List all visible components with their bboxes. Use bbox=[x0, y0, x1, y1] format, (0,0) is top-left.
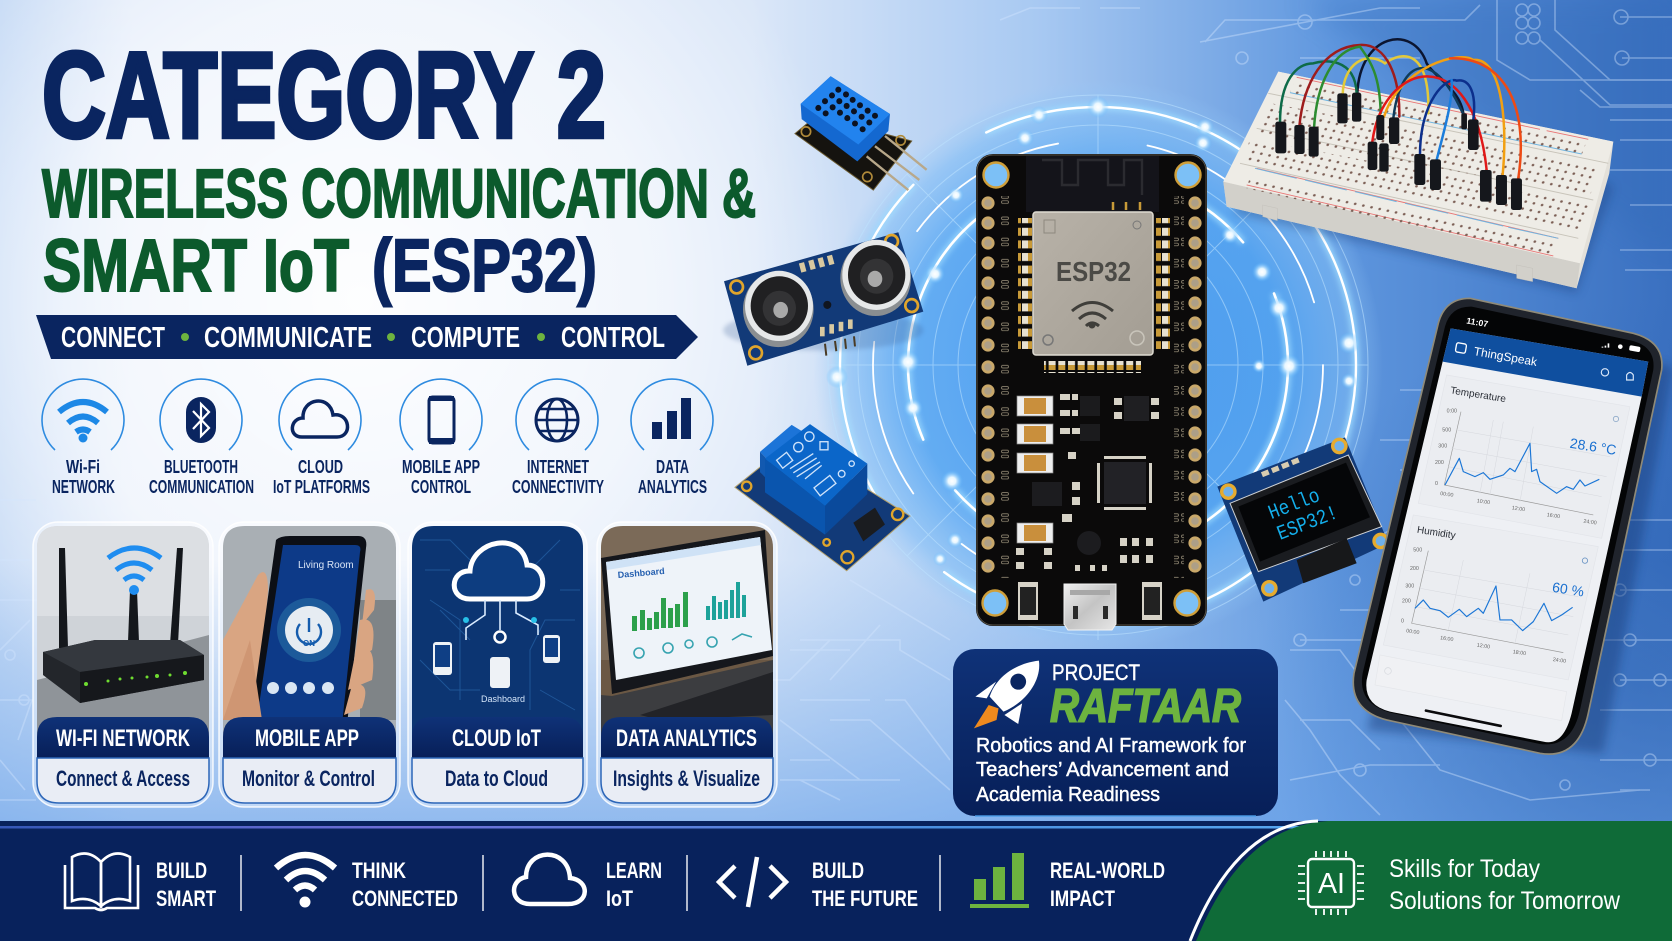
ribbon banner: CONTROL bbox=[561, 322, 665, 354]
label: learn iot: IoT bbox=[606, 886, 633, 911]
temperature chart: 200 bbox=[1435, 460, 1444, 466]
label: build smart bbox=[156, 858, 216, 911]
breadboard with jumper wires bbox=[1223, 39, 1613, 293]
icon: internet globe bbox=[512, 379, 604, 497]
icon: bluetooth: COMMUNICATION bbox=[149, 477, 254, 497]
icon: mobile app bbox=[400, 379, 482, 497]
icon: cloud bbox=[273, 379, 370, 497]
ribbon banner: CONNECT bbox=[61, 322, 165, 354]
panel: project raftaar: Robotics and AI Framework for bbox=[976, 735, 1246, 757]
icon: ultrasonic sensor bbox=[723, 232, 923, 366]
phone in hand photo bbox=[223, 526, 396, 736]
glowing wireless rings bbox=[813, 80, 1383, 650]
icon: wi-fi network: Wi-Fi bbox=[66, 457, 100, 477]
ESP32 metal shield bbox=[1033, 212, 1153, 355]
icon: relay module bbox=[735, 424, 910, 571]
panel: project raftaar: Academia Readiness bbox=[976, 784, 1160, 806]
micro USB port bbox=[1064, 584, 1116, 630]
panel: mobile app card bbox=[219, 522, 400, 807]
humidity chart: 18:00 bbox=[1512, 649, 1526, 657]
cloud network illustration: Dashboard bbox=[481, 694, 525, 704]
panel: skills tagline: Skills for Today bbox=[1389, 855, 1540, 883]
icon row bbox=[42, 379, 713, 497]
OLED display: Hello bbox=[1266, 485, 1324, 526]
empty phone card and home bar bbox=[1375, 655, 1567, 726]
app header: ThingSpeak bbox=[1473, 344, 1539, 369]
icon: wi-fi bbox=[276, 855, 335, 905]
header pins bbox=[981, 196, 1202, 578]
title: category 2: CATEGORY 2 bbox=[42, 27, 606, 163]
label: build the future bbox=[812, 858, 918, 911]
panel: mobile app card: Monitor & Control bbox=[242, 766, 375, 791]
icon: DHT temperature sensor bbox=[795, 76, 927, 190]
status bar: 11:07 bbox=[1466, 315, 1489, 329]
app header bbox=[1443, 328, 1648, 397]
smartphone showing ThingSpeak bbox=[1353, 298, 1672, 754]
label: real-world impact: IMPACT bbox=[1050, 886, 1115, 911]
icon: AI chip bbox=[1298, 851, 1364, 915]
label: build the future: THE FUTURE bbox=[812, 886, 918, 911]
label: think connected: THINK bbox=[352, 858, 406, 883]
panel: wi-fi network card: WI-FI NETWORK bbox=[56, 725, 190, 752]
temperature chart: 0 bbox=[1435, 481, 1438, 487]
label: build the future: BUILD bbox=[812, 858, 864, 883]
icon: mobile app: MOBILE APP bbox=[402, 457, 480, 477]
icon: cloud: CLOUD bbox=[298, 457, 343, 477]
humidity chart: 300 bbox=[1405, 583, 1414, 589]
panel: wi-fi network card bbox=[33, 522, 213, 807]
icon: internet globe: INTERNET bbox=[527, 457, 589, 477]
temperature chart: 12:00 bbox=[1511, 505, 1525, 513]
panel: data analytics card: DATA ANALYTICS bbox=[616, 725, 757, 752]
icon: bluetooth bbox=[149, 379, 254, 497]
status bar bbox=[1466, 315, 1641, 352]
icon: bar chart bbox=[970, 853, 1029, 908]
panel: project raftaar: RAFTAAR bbox=[1050, 679, 1241, 732]
icon: wi-fi network bbox=[42, 379, 124, 497]
label: learn iot bbox=[606, 858, 662, 911]
temperature chart: 28.6 °C bbox=[1569, 435, 1618, 458]
humidity chart bbox=[1383, 515, 1598, 680]
icon: data analytics: ANALYTICS bbox=[638, 477, 707, 497]
ESP32 board bbox=[976, 154, 1207, 630]
ribbon banner: COMPUTE bbox=[411, 322, 520, 354]
label: build smart: BUILD bbox=[156, 858, 207, 883]
temperature chart bbox=[1418, 375, 1630, 538]
SMD components bbox=[1016, 394, 1162, 620]
phone screen bbox=[1366, 328, 1648, 742]
wifi antenna area bbox=[1026, 156, 1159, 212]
ribbon banner bbox=[36, 315, 698, 359]
panel: wi-fi network card: Connect & Access bbox=[56, 766, 190, 791]
panel: cloud iot card bbox=[408, 522, 587, 807]
label: think connected bbox=[352, 858, 458, 911]
icon: data analytics: DATA bbox=[656, 457, 689, 477]
temperature chart: 0:00 bbox=[1447, 409, 1457, 415]
OLED display bbox=[1217, 437, 1388, 602]
mounting holes bbox=[982, 162, 1200, 616]
humidity chart: 24:00 bbox=[1552, 657, 1566, 665]
humidity chart: 500 bbox=[1413, 548, 1422, 554]
ESP32 chip pads bbox=[1018, 218, 1170, 373]
humidity chart: 200 bbox=[1410, 566, 1419, 572]
temperature chart: 00:00 bbox=[1440, 491, 1454, 499]
icon: data analytics bbox=[631, 379, 713, 497]
panel: project raftaar: Teachers’ Advancement and bbox=[976, 759, 1229, 781]
temperature chart: 300 bbox=[1438, 444, 1447, 450]
icon: rocket bbox=[974, 661, 1039, 728]
icon: cloud bbox=[514, 855, 585, 904]
icon: mobile app: CONTROL bbox=[411, 477, 471, 497]
subtitle ESP32: (ESP32) bbox=[372, 224, 597, 307]
ESP32 metal shield: ESP32 bbox=[1056, 256, 1131, 287]
panel: skills tagline bbox=[1190, 821, 1672, 941]
label: think connected: CONNECTED bbox=[352, 886, 458, 911]
phone in hand photo: Living Room bbox=[298, 560, 354, 571]
temperature chart: 10:00 bbox=[1476, 498, 1490, 506]
panel: cloud iot card: Data to Cloud bbox=[445, 766, 548, 791]
label: learn iot: LEARN bbox=[606, 858, 662, 883]
humidity chart: 16:00 bbox=[1440, 635, 1454, 643]
temperature chart: Temperature bbox=[1450, 385, 1507, 405]
humidity chart: 0 bbox=[1401, 619, 1404, 625]
label: build smart: SMART bbox=[156, 886, 216, 911]
panel: mobile app card: MOBILE APP bbox=[255, 725, 359, 752]
panel: project raftaar bbox=[953, 649, 1278, 816]
subtitle line 2: SMART IoT bbox=[43, 224, 349, 307]
icon: wi-fi network: NETWORK bbox=[52, 477, 115, 497]
icon: internet globe: CONNECTIVITY bbox=[512, 477, 604, 497]
icon: book bbox=[65, 853, 138, 910]
footer bar bbox=[0, 821, 1672, 941]
subtitle line 1: WIRELESS COMMUNICATION & bbox=[42, 155, 756, 232]
laptop dashboard photo bbox=[601, 526, 773, 736]
phone in hand photo: ON bbox=[303, 639, 315, 648]
panel: cloud iot card: CLOUD IoT bbox=[452, 725, 541, 752]
temperature chart: 24:00 bbox=[1583, 519, 1597, 526]
humidity chart: 200 bbox=[1402, 598, 1411, 604]
ribbon banner: COMMUNICATE bbox=[204, 322, 372, 354]
humidity chart: 12:00 bbox=[1476, 643, 1490, 650]
icon: AI chip: AI bbox=[1318, 868, 1345, 900]
panel: project raftaar: PROJECT bbox=[1052, 660, 1140, 685]
icon: code brackets bbox=[719, 857, 786, 907]
icon: bluetooth: BLUETOOTH bbox=[164, 457, 238, 477]
icon: cloud: IoT PLATFORMS bbox=[273, 477, 370, 497]
OLED display: ESP32! bbox=[1274, 502, 1342, 547]
humidity chart: Humidity bbox=[1416, 525, 1456, 542]
temperature chart: 16:00 bbox=[1546, 512, 1560, 520]
cloud network illustration bbox=[412, 526, 583, 736]
label: real-world impact bbox=[1050, 858, 1165, 911]
temperature chart: 500 bbox=[1442, 428, 1451, 434]
label: real-world impact: REAL-WORLD bbox=[1050, 858, 1165, 883]
panel: data analytics card: Insights & Visualize bbox=[613, 766, 760, 791]
humidity chart: 60 % bbox=[1551, 579, 1585, 600]
humidity chart: 00:00 bbox=[1406, 628, 1420, 636]
panel: skills tagline: Solutions for Tomorrow bbox=[1389, 887, 1621, 915]
router photo bbox=[37, 526, 209, 736]
panel: data analytics card bbox=[597, 522, 777, 807]
laptop dashboard photo: Dashboard bbox=[617, 566, 665, 580]
